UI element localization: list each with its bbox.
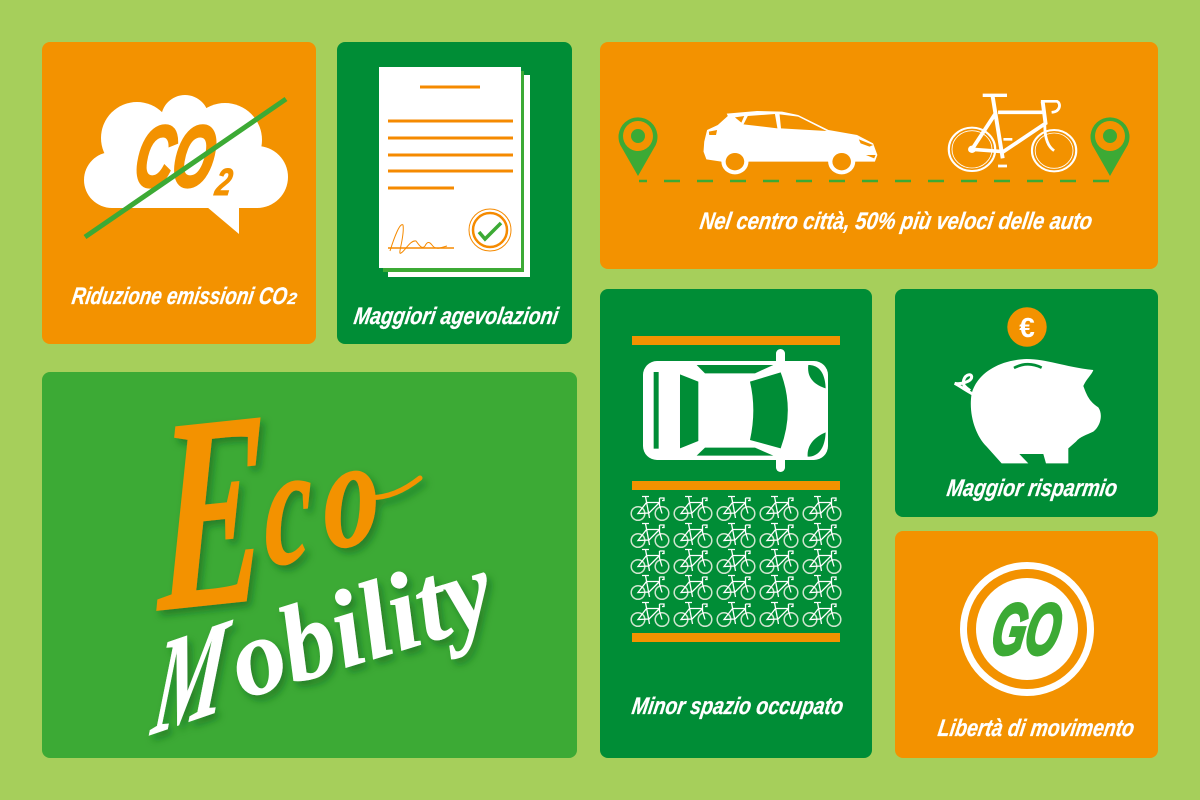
label: Libertà di movimento: Libertà di movimento <box>936 715 1136 742</box>
title: Eco <box>157 353 420 671</box>
panel background <box>600 42 1158 269</box>
title: Eco: o <box>320 404 382 582</box>
label: Minor spazio occupato: Minor spazio occupato <box>630 693 845 720</box>
icon: GO button: GO <box>986 589 1067 670</box>
label: Maggior risparmio: Maggior risparmio <box>945 475 1119 502</box>
panel background <box>600 289 872 758</box>
label: Nel centro città: Nel centro città, 50% più veloci delle auto <box>698 208 1094 235</box>
icon: euro coin <box>1007 307 1047 347</box>
title: Mobility: obility <box>214 527 507 722</box>
panel: savings <box>895 289 1158 517</box>
icon: start pin <box>618 117 658 176</box>
label: Riduzione emissioni CO2: 2 <box>285 290 298 308</box>
panel background <box>895 531 1158 758</box>
icon: GO button <box>960 562 1094 696</box>
icon: speech cloud with CO2 <box>84 95 288 237</box>
panel: less space occupied <box>600 289 872 758</box>
panel: speed comparison <box>600 42 1158 269</box>
icon: road bicycle <box>949 95 1076 171</box>
panel: freedom of movement <box>895 531 1158 758</box>
bicycles grid <box>631 496 841 626</box>
icon: car side view <box>704 111 877 174</box>
icon: piggy bank <box>955 359 1101 463</box>
icon: speech cloud with CO2: CO <box>129 109 222 205</box>
label: Maggiori agevolazioni: Maggiori agevolazioni <box>352 303 561 330</box>
title: Eco: c <box>265 407 312 602</box>
icon: car top view <box>643 349 828 472</box>
panel background <box>42 372 577 758</box>
panel: Eco Mobility title <box>42 353 577 765</box>
title: Mobility: M <box>145 587 237 765</box>
panel background <box>337 42 572 344</box>
dashed route line <box>639 180 1109 182</box>
icon: end pin <box>1090 117 1130 176</box>
icon: signed document <box>379 67 530 277</box>
panel background <box>42 42 316 344</box>
title: Eco: E <box>157 353 267 671</box>
title: Mobility <box>145 527 507 765</box>
icon: euro coin: € <box>1019 312 1035 343</box>
panel: incentives <box>337 42 572 344</box>
panel background <box>895 289 1158 517</box>
panel: CO2 reduction <box>42 42 316 344</box>
lane bars <box>632 336 840 642</box>
label: Riduzione emissioni CO2: Riduzione emissioni CO <box>70 283 289 310</box>
icon: speech cloud with CO2: 2 <box>212 161 235 204</box>
